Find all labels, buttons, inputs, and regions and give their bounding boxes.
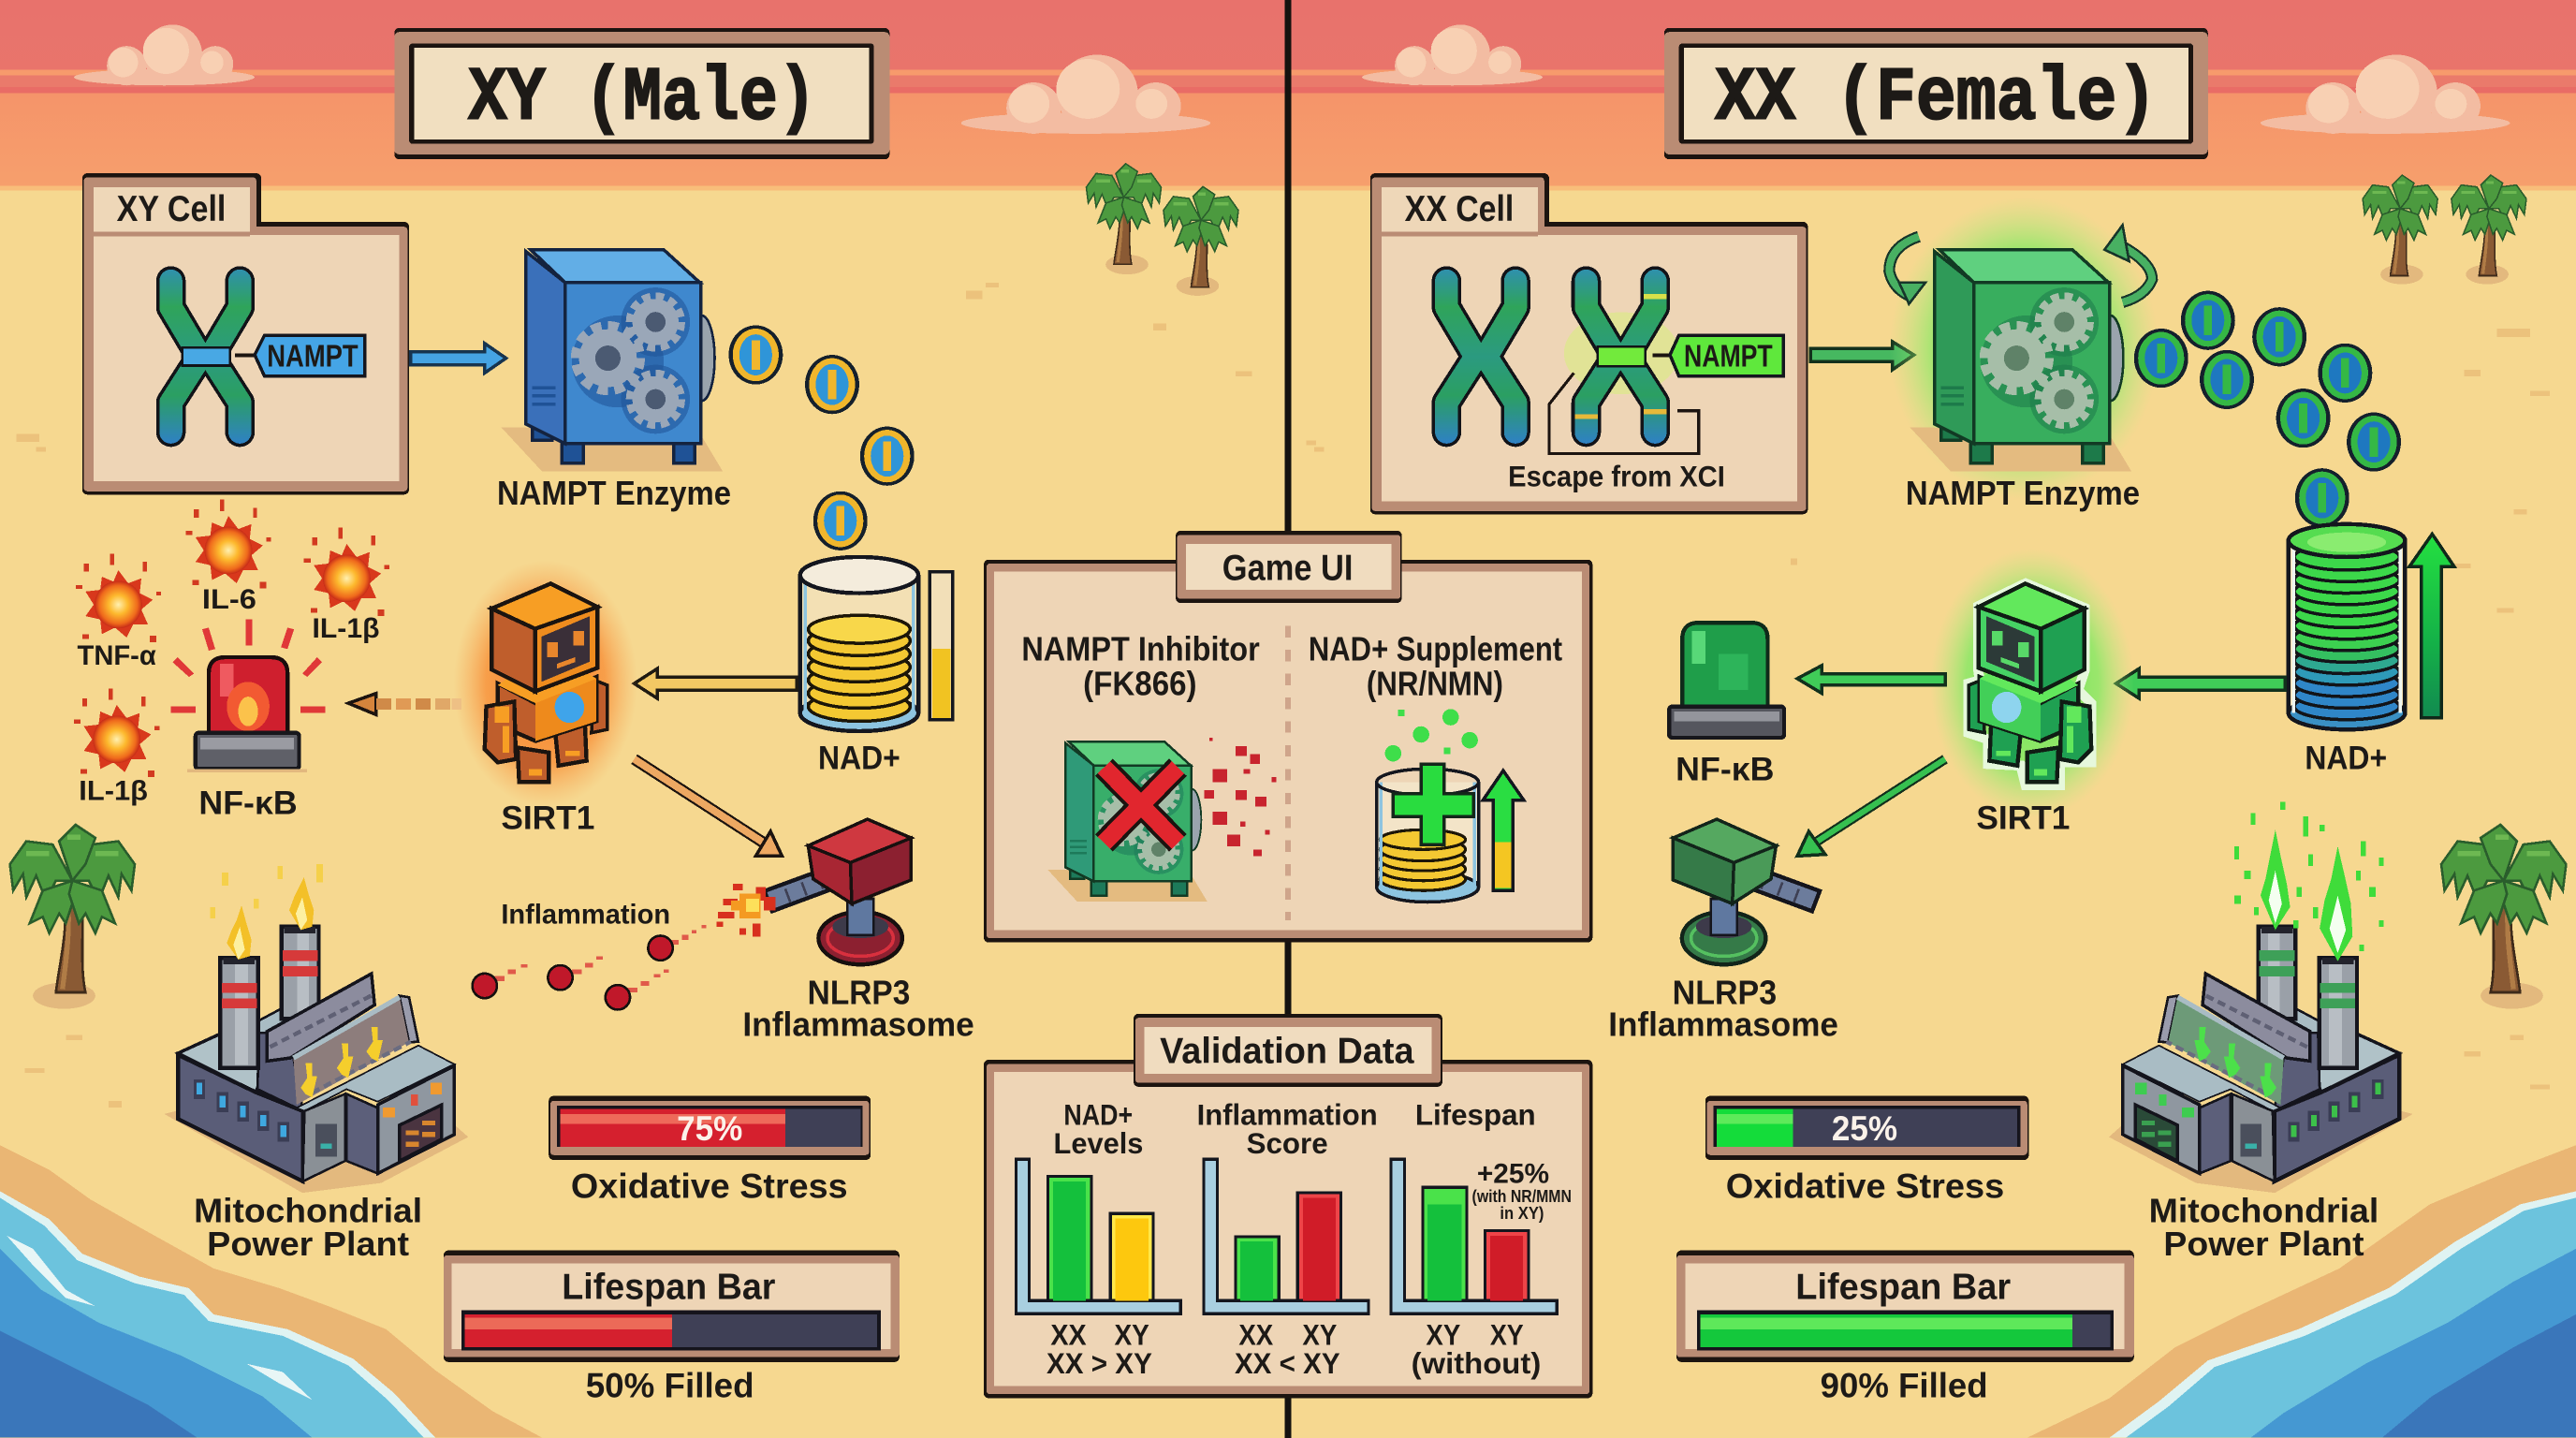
icon: cytokine burst IL-6 xyxy=(185,500,271,588)
label: IL-6: IL-6 xyxy=(202,584,256,615)
alert rays around siren xyxy=(171,620,326,713)
glow: SIRT1 green xyxy=(1930,549,2134,818)
palm tree: upper left pair 2 xyxy=(1164,186,1238,296)
icon: yellow flames left xyxy=(211,864,323,960)
palm tree: upper left pair 1 xyxy=(1086,164,1162,274)
icon: NAMPT enzyme green safe xyxy=(1910,250,2131,472)
icon: chromosome xyxy=(171,281,240,433)
label: NAMPT Enzyme right: NAMPT Enzyme xyxy=(1906,474,2140,512)
label: NAD+ Supplement NR/NMN: NAD+ Supplement xyxy=(1309,630,1562,668)
arrow: NAD+ rising xyxy=(2409,534,2454,718)
icon: muzzle flash xyxy=(716,884,775,936)
center divider line xyxy=(1284,0,1292,1438)
label: NAMPT Inhibitor FK866: (FK866) xyxy=(1083,664,1197,702)
icon: cytokine burst IL-1b bottom xyxy=(74,688,159,777)
icon: NLRP3 red turret xyxy=(765,819,911,964)
label: XY Cell: XY Cell xyxy=(117,189,226,229)
cloud: right sky large xyxy=(2261,54,2510,134)
label: IL-1b top: IL-1β xyxy=(313,613,379,644)
caption: 50% Filled: 50% Filled xyxy=(586,1367,754,1405)
heading: Validation Data: Validation Data xyxy=(1160,1032,1414,1072)
palm tree: large right xyxy=(2441,825,2566,1009)
chart: Lifespan: Lifespan xyxy=(1415,1097,1536,1131)
label: NLRP3 Inflammasome left: Inflammasome xyxy=(742,1005,974,1044)
connector line xyxy=(235,353,256,358)
icon: coins falling right xyxy=(2134,291,2401,527)
label: Inflammation: Inflammation xyxy=(501,899,670,930)
icon: green particles xyxy=(1385,709,1478,761)
label: Mitochondrial Power Plant left: Mitochondrial xyxy=(194,1192,422,1230)
chart: Lifespan: XY xyxy=(1426,1317,1460,1351)
icon: mitochondrial power plant right xyxy=(2109,927,2413,1193)
panel: lifespan bar right xyxy=(1676,1251,2134,1362)
glow: enzyme green xyxy=(1889,198,2159,500)
tag: NAMPT xyxy=(255,335,365,376)
icon: green sparks right xyxy=(2234,801,2384,961)
value: 75%: 75% xyxy=(677,1109,742,1148)
icon: inflammation projectiles xyxy=(473,925,707,1009)
chart: Inflammation Score: XY xyxy=(1302,1317,1337,1351)
tag text: NAMPT green: NAMPT xyxy=(1684,339,1773,374)
label: Oxidative Stress left: Oxidative Stress xyxy=(571,1167,848,1205)
label: NAMPT Inhibitor FK866 xyxy=(1021,630,1260,702)
label: NF-kB right: NF-κB xyxy=(1676,752,1774,788)
chart: Lifespan: (with NR/MMN xyxy=(1472,1186,1572,1206)
heading: Lifespan Bar right: Lifespan Bar xyxy=(1795,1267,2011,1307)
label: NF-kB left: NF-κB xyxy=(198,785,298,822)
caption: 90% Filled: 90% Filled xyxy=(1821,1367,1988,1405)
heading: Game UI: Game UI xyxy=(1222,549,1353,589)
icon: red cross xyxy=(1104,768,1178,843)
label: Escape from XCI: Escape from XCI xyxy=(1508,459,1725,492)
icon: cytokine burst IL-1b top xyxy=(304,527,389,616)
cloud: left sky large xyxy=(961,54,1210,134)
chart: NAD+ Levels: Levels xyxy=(1054,1126,1143,1160)
chart: Inflammation Score: XX xyxy=(1238,1317,1273,1351)
icon: green plus xyxy=(1393,764,1473,844)
title banner: XY (Male) xyxy=(394,28,889,159)
chart: Inflammation Score xyxy=(1197,1097,1378,1380)
arrow: XX cell to enzyme xyxy=(1810,342,1914,370)
label: Mitochondrial Power Plant left xyxy=(194,1192,422,1263)
label: NLRP3 Inflammasome right xyxy=(1608,973,1838,1044)
tab: Game UI xyxy=(1176,531,1402,603)
label: NLRP3 Inflammasome left: NLRP3 xyxy=(808,973,910,1011)
icon: NF-kB green siren xyxy=(1669,623,1784,738)
chart: NAD+ Levels: XX > XY xyxy=(1046,1346,1152,1380)
arrow: SIRT1 to NLRP3 left xyxy=(634,759,782,856)
chart: Lifespan: in XY) xyxy=(1500,1203,1544,1223)
chart: NAD+ Levels: XX xyxy=(1050,1317,1087,1351)
icon: NAD+ cylinder right xyxy=(2289,524,2405,729)
icon: SIRT1 robot orange xyxy=(485,583,607,785)
chart: Inflammation Score: XX < XY xyxy=(1235,1346,1340,1380)
icon: rotation arrows xyxy=(1889,225,2152,304)
panel: XY cell xyxy=(82,173,409,494)
icon: coins falling left xyxy=(728,325,915,550)
label: SIRT1 right: SIRT1 xyxy=(1976,800,2070,836)
tab: Validation Data xyxy=(1134,1014,1442,1087)
icon: chromosome X escaping xyxy=(1574,281,1667,433)
arrow: NAD+ to SIRT1 left xyxy=(634,668,797,698)
title banner: XX (Female) xyxy=(1664,28,2208,159)
title text: XY (Male): XY (Male) xyxy=(468,56,816,141)
label: NLRP3 Inflammasome left xyxy=(742,973,974,1044)
palm tree: upper right pair 1 xyxy=(2363,175,2437,285)
label: TNF-a: TNF-α xyxy=(78,640,156,671)
icon: supplement cylinder xyxy=(1377,769,1479,902)
dashed divider xyxy=(1286,626,1290,920)
chart: NAD+ Levels: NAD+ xyxy=(1063,1097,1133,1131)
panel: XX cell xyxy=(1370,173,1808,514)
bracket: escape from XCI xyxy=(1549,373,1699,453)
label: IL-1b bottom: IL-1β xyxy=(79,776,148,807)
icon: NF-kB red siren xyxy=(187,657,307,772)
label: NAMPT Inhibitor FK866: NAMPT Inhibitor xyxy=(1021,630,1260,668)
icon: rising gauge arrow xyxy=(1483,770,1524,890)
panel: Game UI xyxy=(984,531,1592,943)
chart: Inflammation Score: Score xyxy=(1247,1126,1328,1160)
label: NAD+ right: NAD+ xyxy=(2305,740,2387,776)
label: NAD+ Supplement NR/NMN: (NR/NMN) xyxy=(1367,664,1503,702)
label: NAMPT Enzyme left: NAMPT Enzyme xyxy=(497,474,731,512)
icon: red particles xyxy=(1204,738,1277,856)
label: Mitochondrial Power Plant right xyxy=(2149,1192,2378,1263)
arrow: NAD+ to SIRT1 right xyxy=(2116,668,2285,698)
cloud: left sky small xyxy=(74,24,255,85)
chart: Lifespan: (without) xyxy=(1412,1346,1541,1380)
arrow: SIRT1 to NF-kB dashed xyxy=(348,694,461,714)
chart: Inflammation Score: Inflammation xyxy=(1197,1097,1378,1131)
cloud: right sky small xyxy=(1362,24,1543,85)
chart: NAD+ Levels xyxy=(1017,1097,1180,1380)
beach: right shoreline xyxy=(2027,1145,2576,1438)
stat bar: oxidative stress 75% xyxy=(549,1096,871,1160)
arrow: SIRT1 to NF-kB right xyxy=(1797,666,1945,694)
icon: mitochondrial power plant left xyxy=(165,927,468,1193)
connector line green xyxy=(1653,353,1673,358)
label: Mitochondrial Power Plant right: Power Plant xyxy=(2163,1225,2364,1263)
beach: left shoreline xyxy=(0,1145,542,1438)
chart: Lifespan: +25% xyxy=(1477,1159,1549,1190)
icon: cytokine burst TNF-a xyxy=(76,553,161,642)
icon: NLRP3 green turret xyxy=(1673,819,1820,964)
panel: lifespan bar left xyxy=(444,1251,900,1362)
panel: Validation Data xyxy=(984,1014,1592,1399)
label: NLRP3 Inflammasome right: Inflammasome xyxy=(1608,1005,1838,1044)
label: NAD+ Supplement NR/NMN xyxy=(1309,630,1562,702)
icon: NAMPT enzyme blue safe xyxy=(501,250,723,472)
label: Oxidative Stress right: Oxidative Stress xyxy=(1726,1167,2004,1205)
arrow: SIRT1 to NLRP3 right xyxy=(1797,759,1945,856)
icon: blocked enzyme xyxy=(1047,741,1208,902)
label: Mitochondrial Power Plant left: Power Plant xyxy=(207,1225,409,1263)
chart: Lifespan xyxy=(1391,1097,1572,1380)
label: SIRT1 left: SIRT1 xyxy=(501,800,594,836)
gauge: NAD+ level left xyxy=(929,572,953,720)
value: 25%: 25% xyxy=(1832,1109,1897,1148)
glow: SIRT1 orange xyxy=(453,560,637,807)
chart: Lifespan: XY xyxy=(1490,1317,1524,1351)
title text: XX (Female): XX (Female) xyxy=(1715,56,2157,141)
stat bar: oxidative stress 25% xyxy=(1705,1096,2029,1160)
label: XX Cell: XX Cell xyxy=(1405,189,1514,229)
palm tree: upper right pair 2 xyxy=(2452,175,2526,285)
icon: SIRT1 robot green xyxy=(1969,583,2091,785)
icon: NAD+ cylinder left xyxy=(800,557,918,731)
icon: chromosome X inactive xyxy=(1446,281,1515,433)
label: Mitochondrial Power Plant right: Mitochondrial xyxy=(2149,1192,2378,1230)
heading: Lifespan Bar left: Lifespan Bar xyxy=(562,1267,775,1307)
arrow: XY cell to enzyme xyxy=(411,344,506,373)
chart: NAD+ Levels: XY xyxy=(1114,1317,1149,1351)
palm tree: large left xyxy=(10,825,135,1009)
tag text: NAMPT: NAMPT xyxy=(267,339,359,374)
label: NLRP3 Inflammasome right: NLRP3 xyxy=(1673,973,1777,1011)
glow: escape chromosome xyxy=(1564,312,1679,394)
label: NAD+ left: NAD+ xyxy=(818,740,900,776)
tag: NAMPT green xyxy=(1670,335,1783,376)
